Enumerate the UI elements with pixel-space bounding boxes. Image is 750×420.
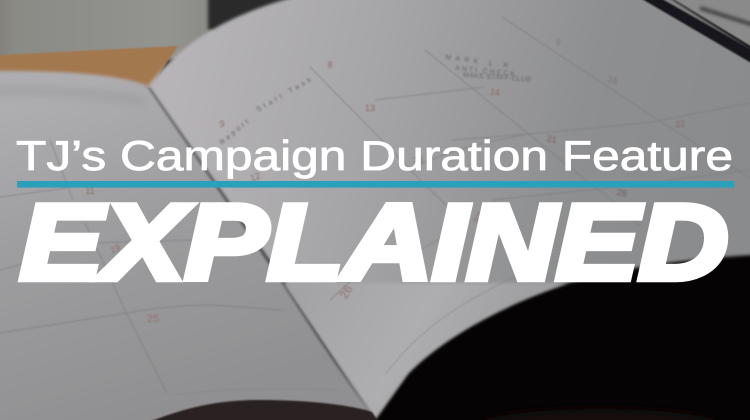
calendar date numbers: 21 xyxy=(546,133,558,145)
calendar date numbers: 26 xyxy=(337,282,356,301)
table surface xyxy=(0,46,178,88)
title: TJ's Campaign Duration Feature: TJ’s Campaign Duration Feature xyxy=(16,132,733,179)
calendar date numbers: 27 xyxy=(472,211,487,226)
left page xyxy=(0,71,372,420)
calendar date numbers: 9 xyxy=(219,119,225,129)
calendar date numbers: 22 xyxy=(674,118,686,130)
calendar date numbers: 12 xyxy=(249,171,262,183)
calendar date numbers: 25 xyxy=(147,313,159,325)
calendar date numbers: 9 xyxy=(555,37,561,47)
teal divider bar xyxy=(17,181,734,188)
calendar date numbers: 28 xyxy=(616,187,628,199)
calendar date numbers: 16 xyxy=(607,74,619,86)
page shadow at spine bottom xyxy=(130,400,384,420)
calendar date numbers: 23 xyxy=(412,154,424,166)
handwritten notes: Report xyxy=(219,119,250,147)
calendar date numbers: 8 xyxy=(327,60,333,70)
handwritten notes: MARK L.R. xyxy=(445,54,515,71)
handwritten notes xyxy=(219,54,532,147)
calendar date numbers: 13 xyxy=(365,103,375,113)
calendar date numbers xyxy=(85,37,686,325)
calendar date numbers: 19 xyxy=(109,243,122,255)
handwritten notes: MAKE STAFF CLUB xyxy=(463,72,532,84)
black cover edge and top-right backdrop xyxy=(642,0,750,58)
calendar date numbers: 14 xyxy=(489,86,501,98)
headline: EXPLAINED: EXPLAINED xyxy=(20,182,728,302)
calendar date numbers: 11 xyxy=(85,186,95,196)
handwritten notes: Start Task xyxy=(256,76,313,114)
handwritten notes: ANTI CHECK xyxy=(455,65,516,78)
